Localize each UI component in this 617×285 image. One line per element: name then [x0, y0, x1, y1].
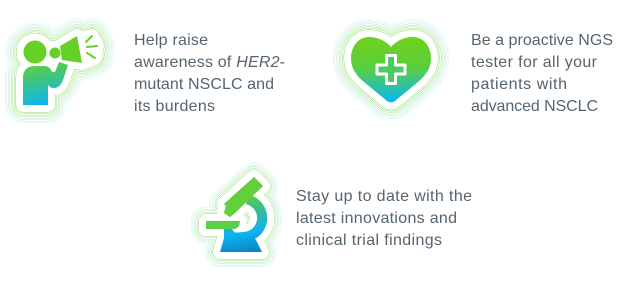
- text: raise awareness: Help raise: [134, 32, 208, 49]
- text: raise awareness: [134, 32, 285, 115]
- icon: microscope: [206, 177, 267, 252]
- text: proactive NGS tester: Be a proactive NGS: [471, 32, 613, 49]
- text: proactive NGS tester: advanced NSCLC: [471, 98, 598, 115]
- text: raise awareness: mutant NSCLC and: [134, 76, 274, 93]
- text: proactive NGS tester: [471, 32, 613, 115]
- text: stay up to date: Stay up to date with the: [296, 188, 472, 205]
- icon: heart with cross: [351, 37, 431, 102]
- text: raise awareness: awareness of HER2-: [134, 54, 285, 71]
- text: stay up to date: [296, 188, 472, 249]
- text: stay up to date: clinical trial findings: [296, 232, 442, 249]
- icon: medical cross: [377, 56, 405, 84]
- text: raise awareness: its burdens: [134, 98, 215, 115]
- icon: person with megaphone: [23, 36, 97, 105]
- text: proactive NGS tester: tester for all your: [471, 54, 598, 71]
- text: stay up to date: latest innovations and: [296, 210, 457, 227]
- text: proactive NGS tester: patients with: [471, 76, 567, 93]
